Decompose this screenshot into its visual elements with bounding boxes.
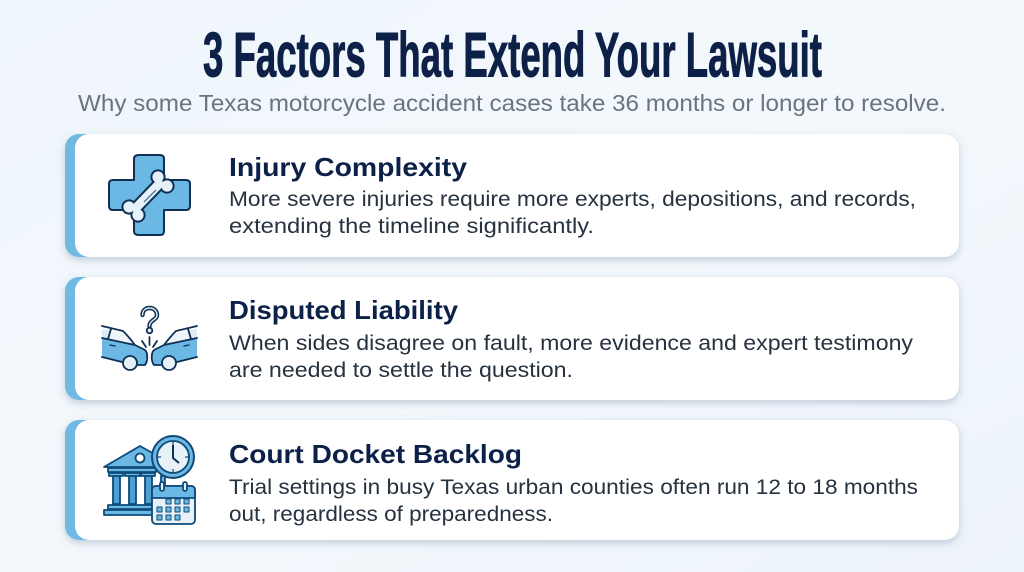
courthouse [104,446,158,515]
panel: court docket backlog [65,420,959,540]
clock [152,436,194,486]
heading: Injury Complexity [229,152,468,182]
calendar [152,482,195,524]
subtitle: Why some Texas motorcycle accident cases take 36 months or longer to resolve. [78,90,946,116]
description: When sides disagree on fault, more evidence and expert testimony [229,331,913,355]
description: out, regardless of preparedness. [229,502,553,526]
question mark [142,308,157,333]
description: extending the timeline significantly. [229,214,594,238]
icon: courthouse, clock and calendar [104,436,195,524]
description [229,187,916,238]
heading: Disputed Liability [229,295,459,325]
card background [65,420,959,540]
panel: disputed liability [65,277,959,400]
description: are needed to settle the question. [229,358,573,382]
description: Trial settings in busy Texas urban counties often run 12 to 18 months [229,475,918,499]
description [229,331,913,382]
right car [152,326,197,370]
panel: injury complexity [65,134,959,257]
description: More severe injuries require more experts, depositions, and records, [229,187,916,211]
icon: two colliding cars with question mark [102,308,197,370]
icon: medical cross with bone [109,155,190,235]
impact lines [142,337,157,347]
card background [65,134,959,257]
card background [65,277,959,400]
description [229,475,918,526]
heading: Court Docket Backlog [229,439,522,469]
left car [102,326,147,370]
